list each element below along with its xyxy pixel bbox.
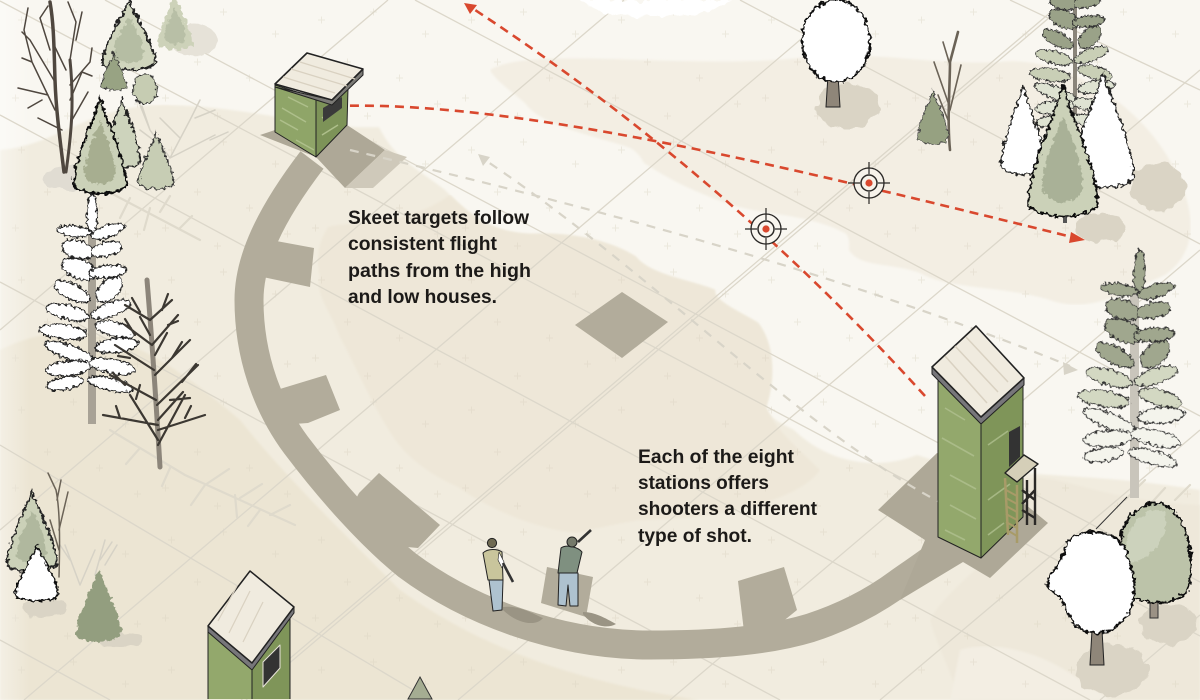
callout: eight stations: shooters a different <box>638 499 818 520</box>
tree: sage pine front right <box>1029 85 1097 223</box>
tree: bare tree top-left <box>18 2 92 172</box>
callout: eight stations: type of shot. <box>638 526 752 547</box>
target 2 <box>745 208 787 250</box>
tree: thin bare tree center-right <box>934 32 961 150</box>
callout: flight paths: paths from the high <box>348 261 531 282</box>
tree: back sage pine <box>103 0 155 70</box>
shooter 2 shadow <box>583 612 616 626</box>
gray dashed flight paths <box>350 150 1078 505</box>
person: aiming shooter <box>558 530 591 606</box>
tree: front sage pine <box>74 98 126 194</box>
station ring walkway <box>249 125 1048 645</box>
center marker square <box>575 292 668 358</box>
tower walls <box>938 378 1023 558</box>
tree: pine right small <box>138 133 174 189</box>
tree: bare fir left <box>103 280 205 467</box>
station marker 5 <box>738 567 797 640</box>
tree: small dark pine center-right <box>918 90 948 144</box>
tree: dark pine bottom left <box>76 568 122 642</box>
bottom house walls <box>208 618 290 699</box>
high house walls <box>275 85 348 157</box>
shooter station square <box>541 567 593 617</box>
gray arrowhead right <box>1063 362 1078 375</box>
tree: white round tree top <box>802 0 870 107</box>
tower low house <box>932 326 1038 558</box>
low house bottom <box>208 571 294 699</box>
station marker 3 <box>350 473 440 548</box>
person: waiting shooter with vest <box>483 538 513 611</box>
high house long shadow <box>345 150 407 188</box>
callout: eight stations: Each of the eight <box>638 447 795 468</box>
red dashed target trajectories <box>335 3 1085 396</box>
tree: fir right <box>1074 247 1190 498</box>
tree: pine behind <box>104 98 140 168</box>
cloud fragment at top edge <box>580 0 732 18</box>
tree: sage round tree bottom right <box>1118 503 1191 618</box>
tree: tall fir top right <box>1029 0 1115 131</box>
bottom house window <box>263 645 280 687</box>
tree: white pine bottom left <box>16 545 58 601</box>
tree: white pine right <box>1072 72 1134 187</box>
tree connector line <box>1096 497 1127 529</box>
tree: sage pine bottom left <box>7 490 57 572</box>
gray arrowhead up <box>478 154 490 166</box>
target 1 <box>848 162 890 204</box>
tree: thin bare tree bottom left <box>48 473 68 577</box>
branch shadows on the ground <box>105 190 1190 526</box>
tower roof <box>932 326 1024 424</box>
callout: eight stations: stations offers <box>638 473 769 494</box>
high house shadow <box>260 125 385 188</box>
tower door <box>1009 426 1020 467</box>
red arrowhead right <box>1069 232 1085 243</box>
tree: pine tip at bottom edge <box>408 677 432 699</box>
low tower shadow <box>878 453 1048 600</box>
high house <box>275 53 363 157</box>
shooter 1 shadow <box>503 607 543 623</box>
gray bare shrubs <box>60 100 228 585</box>
callout: flight paths: and low houses. <box>348 287 497 308</box>
red arrowhead up-left <box>464 3 477 14</box>
callout: flight paths: Skeet targets follow <box>348 208 529 229</box>
station marker 1 <box>258 238 314 287</box>
tree: white round tree bottom right <box>1047 532 1134 665</box>
tower ladder and stand <box>1005 455 1038 543</box>
tree: small dark pine <box>102 52 126 90</box>
high house roof <box>275 53 363 105</box>
high house window <box>323 97 342 122</box>
station marker 2 <box>270 375 340 425</box>
tree: pale pine top <box>157 0 193 50</box>
tree: white pine left <box>1001 85 1045 175</box>
tree: snowy fir left <box>38 193 138 424</box>
callout: flight paths: consistent flight <box>348 234 498 255</box>
tree: round shrub <box>133 74 157 104</box>
bottom house roof <box>208 571 294 670</box>
